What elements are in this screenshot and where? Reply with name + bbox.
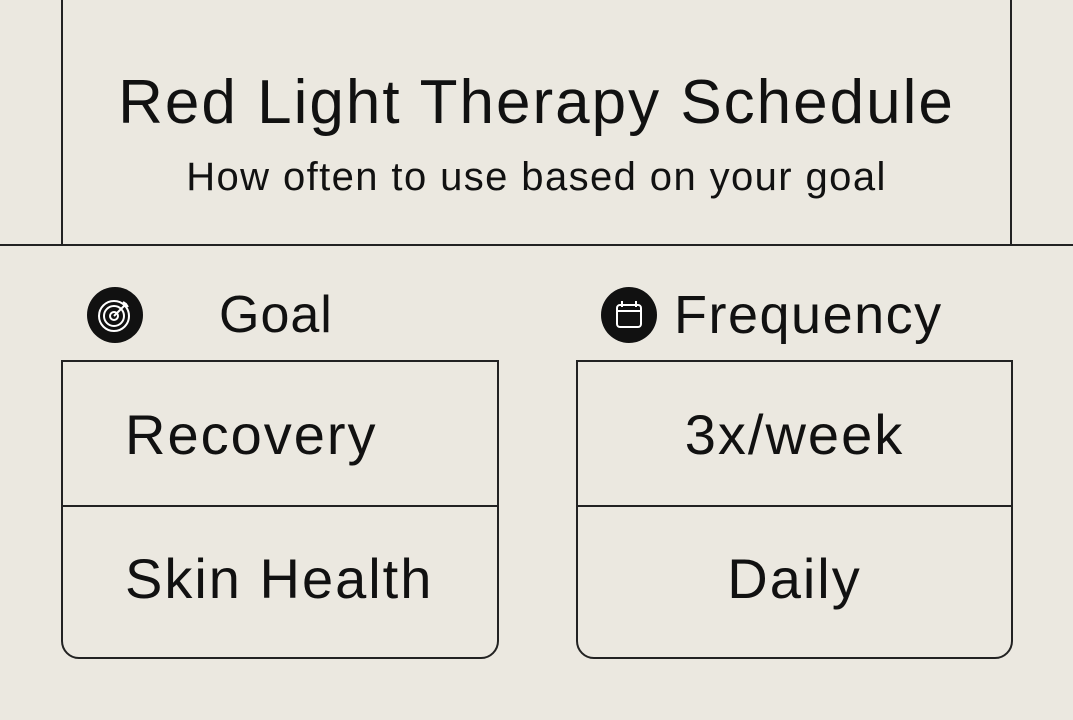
cell: Daily: Daily (727, 546, 862, 610)
cell: Recovery: Recovery (125, 402, 378, 466)
heading: Frequency: Frequency (674, 285, 943, 345)
heading: Goal: Goal (219, 286, 333, 344)
header frame (0, 0, 1073, 246)
cell: 3x/week: 3x/week (685, 402, 904, 466)
title: Red Light Therapy Schedule (118, 68, 955, 137)
panel: goal table (61, 360, 499, 659)
icon: calendar (601, 287, 657, 343)
subtitle: How often to use based on your goal (186, 155, 887, 199)
icon: target (87, 287, 143, 343)
panel: frequency table (576, 360, 1013, 659)
cell: Skin Health: Skin Health (125, 546, 433, 610)
